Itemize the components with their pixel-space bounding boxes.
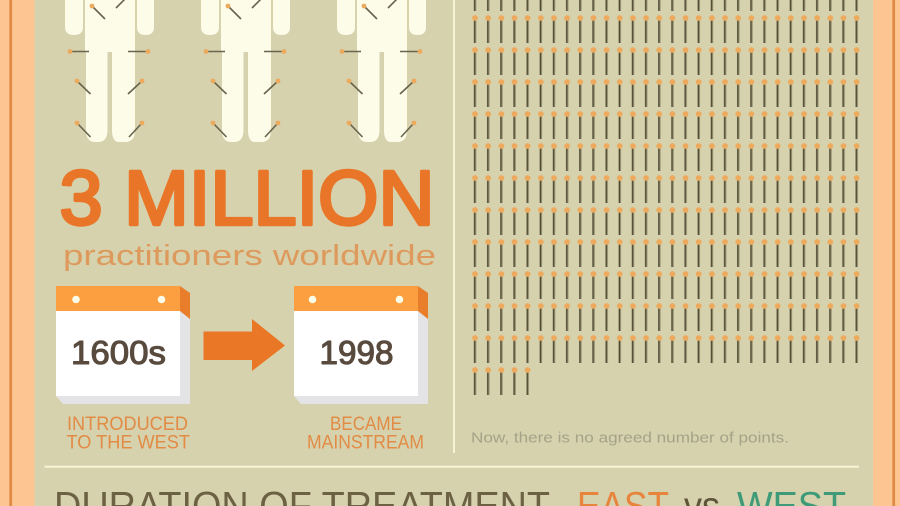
calendar: 1600s [56, 286, 190, 404]
label: introduced to the west: TO THE WEST [66, 432, 190, 454]
figure: person with needles 3 [337, 0, 426, 142]
label: became mainstream [307, 413, 424, 454]
label: became mainstream: BECAME [330, 413, 402, 435]
calendar: 1600s: 1600s [71, 335, 166, 372]
right border [873, 0, 900, 506]
label: became mainstream: MAINSTREAM [307, 432, 424, 454]
note: no agreed number of points: Now, there is no agreed number of points. [471, 430, 789, 446]
figure: person with needles 1 [65, 0, 154, 142]
calendar: 1998 [294, 286, 428, 404]
label: introduced to the west: INTRODUCED [67, 413, 188, 435]
calendar: 1998: 1998 [320, 335, 394, 372]
headline: 3 million: 3 MILLION [60, 156, 434, 242]
section title: duration of treatment [54, 484, 846, 506]
subheading: practitioners worldwide: practitioners worldwide [63, 240, 436, 272]
divider: horizontal [44, 466, 859, 468]
figure: person with needles 2 [201, 0, 290, 142]
left border [0, 0, 34, 506]
divider: vertical [453, 0, 455, 453]
arrow [204, 319, 285, 371]
label: introduced to the west [66, 413, 190, 454]
needle grid: 360 points [468, 0, 863, 399]
